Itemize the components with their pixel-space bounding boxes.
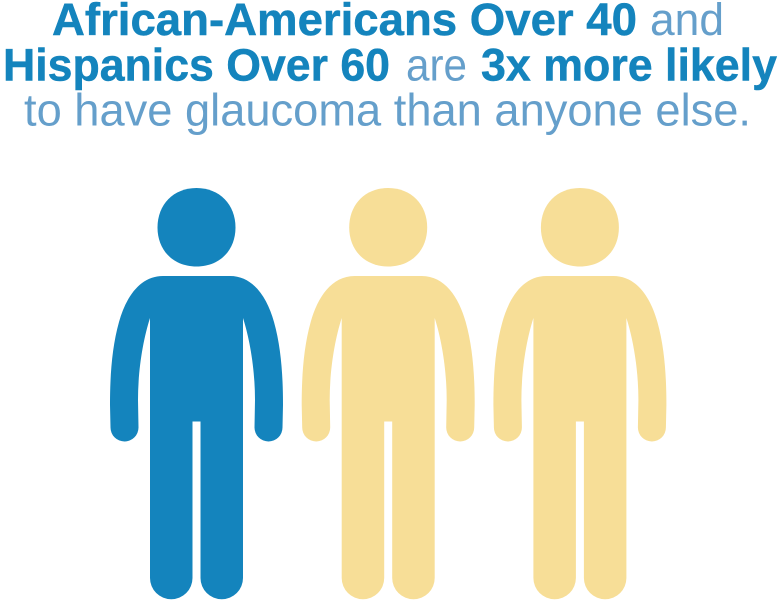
icon: blue person <box>110 188 283 599</box>
icon: yellow person 3 <box>493 188 666 599</box>
icon: yellow person 2 <box>302 188 475 599</box>
title: to have glaucoma than anyone else. <box>24 84 751 136</box>
title: 3x more likely <box>481 40 778 90</box>
title <box>3 0 778 136</box>
title: Hispanics Over 60 <box>3 40 390 90</box>
title: are <box>406 40 467 90</box>
